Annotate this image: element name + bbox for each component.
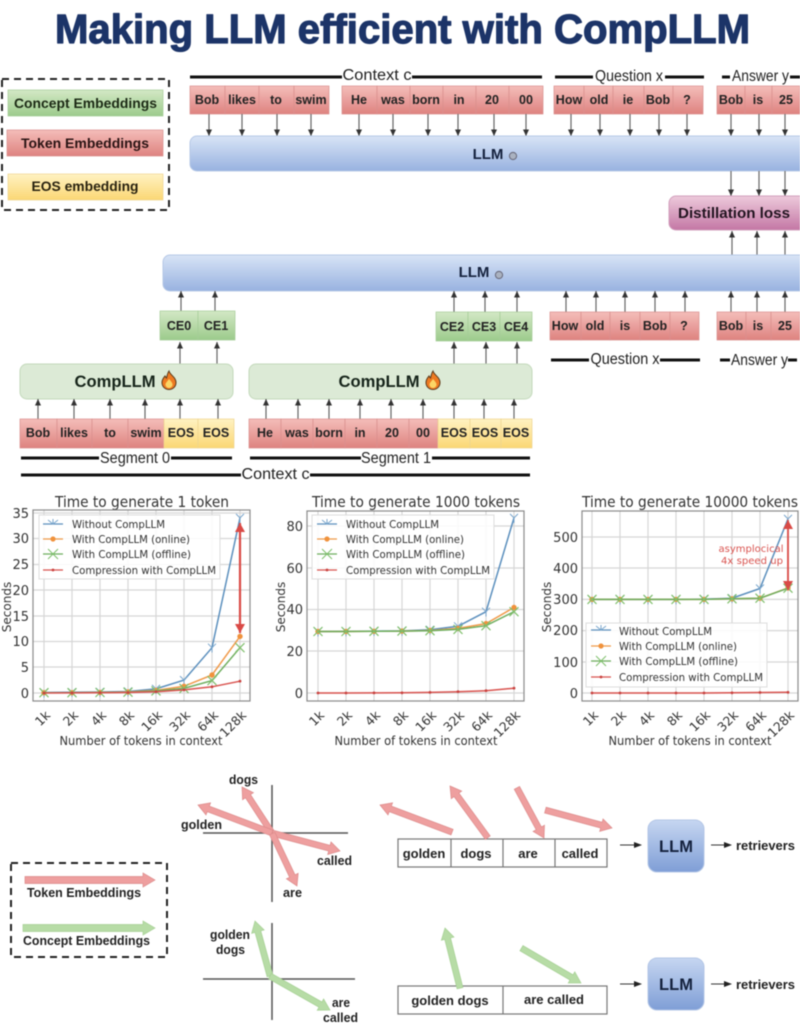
panel: CompLLM segment 1: CompLLM: [338, 372, 420, 391]
tokens: answer y (top): Bob: [719, 93, 744, 107]
concept embeddings: CE2, CE3, CE4: [436, 312, 532, 341]
chart: time to generate 10000 tokens: 400: [553, 562, 578, 577]
tokens: segment 0: EOS: [203, 426, 229, 440]
tokens: answer y (top): is: [753, 93, 763, 107]
chart: time to generate 1000 tokens: 32k: [440, 707, 468, 734]
chart: time to generate 10000 tokens: 8k: [664, 707, 686, 729]
arrows: LLM to distillation loss: [731, 171, 785, 196]
chart: time to generate 1 token: 5: [21, 661, 29, 676]
concept row with vectors: golden dogs: [411, 993, 489, 1008]
tokens: segment 0: EOS: [168, 426, 194, 440]
legend: chart 1: [39, 515, 220, 579]
legend: chart 3: Compression with CompLLM: [619, 671, 763, 684]
token row with vectors: dogs: [460, 846, 492, 861]
tokens: context c (top): Bob: [195, 93, 220, 107]
legend: chart 1: With CompLLM (offline): [72, 548, 191, 561]
chart: time to generate 1000 tokens: [274, 493, 524, 748]
annotation: speed up: 4x speed up: [721, 556, 783, 567]
chart: time to generate 1 token: 2k: [60, 707, 82, 729]
legend: chart 2: With CompLLM (online): [346, 533, 464, 546]
plot: token embedding vectors: are: [283, 885, 302, 900]
arrows: CompLLM to concept embeddings: [180, 342, 517, 364]
tokens: context c (top): He: [351, 93, 367, 107]
panel: student LLM: [163, 255, 800, 291]
tokens: answer y (lower): [717, 312, 800, 340]
token row with vectors: called: [562, 846, 598, 861]
tokens: segment 1: He: [257, 426, 273, 440]
annotation: speed up: asymplocical: [718, 544, 784, 555]
chart: time to generate 1 token: 15: [12, 610, 29, 625]
flow: concept row to LLM to retrievers: LLM: [659, 976, 693, 994]
chart: time to generate 1000 tokens: 128k: [491, 707, 524, 740]
tokens: answer y (top): [717, 86, 800, 114]
annotation: speed up: [718, 544, 784, 567]
tokens: question x (lower): is: [620, 319, 630, 333]
tokens: question x (top): [554, 86, 703, 114]
chart: time to generate 1000 tokens: Seconds: [274, 582, 288, 632]
chart: time to generate 10000 tokens: 1k: [580, 707, 602, 729]
flow: concept row to LLM to retrievers: [620, 958, 795, 1010]
arrows: student LLM to distillation loss: [732, 231, 785, 255]
label: context c (lower): Context c: [242, 466, 310, 483]
tokens: answer y (lower): is: [753, 319, 763, 333]
chart: time to generate 1000 tokens: 0: [295, 687, 303, 702]
chart: time to generate 10000 tokens: 32k: [714, 707, 742, 734]
plot: token embedding vectors: golden: [181, 817, 222, 832]
chart: time to generate 10000 tokens: Seconds: [540, 582, 554, 632]
legend: concept embeddings: Concept Embeddings: [14, 96, 157, 111]
chart: time to generate 1000 tokens: 16k: [412, 707, 440, 734]
concept embeddings: CE2, CE3, CE4: CE3: [472, 320, 496, 334]
tokens: context c (top): swim: [295, 93, 327, 107]
panel: CompLLM segment 0: CompLLM: [74, 372, 156, 391]
flow: concept row to LLM to retrievers: retrievers: [736, 977, 795, 992]
tokens: question x (top): Bob: [646, 93, 671, 107]
tokens: segment 1: born: [315, 426, 343, 440]
legend: chart 3: [586, 623, 767, 687]
chart: time to generate 1 token: 10: [12, 635, 29, 650]
chart: time to generate 1000 tokens: 20: [286, 645, 303, 660]
chart: time to generate 1 token: [0, 493, 250, 748]
arrows: tokens to LLM: [209, 114, 785, 136]
plot: concept embedding vectors: called: [323, 1010, 358, 1025]
tokens: segment 0: swim: [130, 426, 162, 440]
chart: time to generate 1 token: 25: [12, 558, 29, 573]
tokens: context c (top): 20: [485, 93, 499, 107]
label: question x (top): Question x: [595, 68, 663, 85]
tokens: segment 1: was: [284, 426, 309, 440]
tokens: answer y (lower): Bob: [719, 319, 744, 333]
tokens: segment 0: Bob: [26, 426, 51, 440]
concept embeddings: CE0, CE1: CE1: [204, 319, 228, 333]
flow: token row to LLM to retrievers: LLM: [659, 838, 693, 856]
tokens: segment 1: EOS: [503, 426, 529, 440]
chart: time to generate 1000 tokens: 8k: [390, 707, 412, 729]
chart: time to generate 1000 tokens: Number of tokens in context: [334, 734, 498, 748]
legend arrow: token embeddings: [25, 873, 155, 887]
plot: token embedding vectors: dogs: [229, 772, 258, 787]
legend: EOS embedding: [8, 174, 163, 200]
chart: time to generate 10000 tokens: 16k: [686, 707, 714, 734]
legend: chart 3: With CompLLM (online): [619, 640, 737, 653]
tokens: segment 1: EOS: [472, 426, 498, 440]
legend: token embeddings: [7, 130, 163, 156]
chart: time to generate 1 token: 35: [12, 507, 29, 522]
tokens: answer y (top): 25: [779, 93, 793, 107]
legend: chart 2: With CompLLM (offline): [346, 548, 465, 561]
concept embeddings: CE2, CE3, CE4: CE4: [504, 320, 528, 334]
concept embeddings: CE0, CE1: [160, 311, 235, 340]
concept embeddings: CE0, CE1: CE0: [167, 319, 191, 333]
legend: chart 2: [312, 515, 494, 579]
label: segment 1: Segment 1: [361, 450, 431, 467]
plot: token embedding vectors: [181, 772, 352, 902]
legend: chart 1: With CompLLM (online): [72, 533, 190, 546]
legend: chart 1: Compression with CompLLM: [72, 564, 216, 577]
legend: embedding types: [2, 79, 169, 210]
tokens: context c (top): [190, 86, 543, 114]
tokens: segment 1: 20: [385, 426, 399, 440]
chart: time to generate 1 token: 0: [21, 687, 29, 702]
chart: time to generate 10000 tokens: 300: [553, 593, 578, 608]
tokens: segment 1: EOS: [441, 426, 467, 440]
tokens: segment 0: [20, 419, 234, 448]
token row with vectors: [378, 782, 614, 867]
legend: EOS embedding: EOS embedding: [32, 179, 138, 194]
flow: token row to LLM to retrievers: [620, 820, 795, 872]
legend: arrow embedding types: [11, 863, 167, 957]
label: context c (top): Context c: [342, 67, 412, 84]
chart: time to generate 1 token: 16k: [138, 707, 166, 734]
panel: student LLM: LLM: [459, 264, 489, 281]
tokens: context c (top): in: [453, 93, 465, 107]
chart: time to generate 1000 tokens: 2k: [334, 707, 356, 729]
chart: time to generate 1 token: 20: [12, 584, 29, 599]
panel: distillation loss: Distillation loss: [678, 205, 790, 222]
chart: time to generate 1 token: Time to generate 1 token: [54, 493, 229, 511]
panel: CompLLM segment 1: [249, 364, 532, 399]
chart: time to generate 10000 tokens: 0: [570, 687, 578, 702]
chart: time to generate 1 token: 1k: [32, 707, 54, 729]
tokens: segment 1: 00: [416, 426, 430, 440]
tokens: context c (top): to: [270, 93, 282, 107]
chart: time to generate 1 token: Number of tokens in context: [60, 734, 223, 748]
label: answer y (lower): Answer y: [731, 352, 788, 369]
legend text: concept embeddings: Concept Embeddings: [23, 933, 150, 948]
chart: time to generate 1 token: 4k: [88, 707, 110, 729]
chart: time to generate 10000 tokens: 4k: [636, 707, 658, 729]
chart: time to generate 10000 tokens: 128k: [765, 707, 798, 740]
chart: time to generate 10000 tokens: 2k: [608, 707, 630, 729]
panel: distillation loss: [669, 196, 800, 230]
tokens: question x (lower): Bob: [643, 319, 668, 333]
label: answer y (top): Answer y: [732, 68, 789, 85]
tokens: question x (lower): old: [586, 319, 604, 333]
legend: chart 3: Without CompLLM: [619, 625, 712, 638]
chart: time to generate 1 token: Seconds: [0, 582, 14, 632]
panel: teacher LLM: [190, 136, 800, 171]
tokens: context c (top): likes: [228, 93, 256, 107]
chart: time to generate 1000 tokens: 4k: [362, 707, 384, 729]
legend: concept embeddings: [8, 90, 163, 116]
chart: time to generate 1000 tokens: Time to generate 1000 tokens: [311, 493, 520, 511]
chart: time to generate 10000 tokens: Number of tokens in context: [608, 734, 772, 748]
tokens: context c (top): was: [380, 93, 405, 107]
tokens: answer y (lower): 25: [778, 319, 792, 333]
tokens: question x (top): ?: [683, 93, 691, 107]
tokens: segment 0: to: [104, 426, 116, 440]
chart: time to generate 1 token: 30: [12, 532, 29, 547]
legend text: token embeddings: Token Embeddings: [27, 885, 141, 900]
chart: time to generate 1 token: 64k: [194, 707, 222, 734]
arrows: inputs to student LLM: [181, 291, 785, 312]
arrows: tokens to CompLLM: [38, 399, 514, 419]
chart: time to generate 1 token: 8k: [116, 707, 138, 729]
chart: time to generate 1 token: 128k: [217, 707, 250, 740]
panel: teacher LLM: LLM: [473, 146, 503, 163]
legend: chart 2: Compression with CompLLM: [346, 564, 490, 577]
chart: time to generate 10000 tokens: 500: [553, 531, 578, 546]
tokens: question x (lower): [550, 312, 699, 340]
tokens: segment 1: in: [354, 426, 366, 440]
tokens: question x (top): old: [590, 93, 608, 107]
legend: chart 1: Without CompLLM: [72, 518, 165, 531]
tokens: question x (top): How: [556, 93, 582, 107]
chart: time to generate 10000 tokens: 100: [553, 656, 578, 671]
chart: time to generate 10000 tokens: 64k: [742, 707, 770, 734]
concept row with vectors: are called: [524, 992, 584, 1007]
token row with vectors: are: [518, 846, 538, 861]
plot: concept embedding vectors: dogs: [216, 942, 245, 957]
chart: time to generate 1000 tokens: 1k: [306, 707, 328, 729]
plot: concept embedding vectors: are: [332, 995, 350, 1010]
chart: time to generate 1000 tokens: 40: [286, 603, 303, 618]
legend arrow: concept embeddings: [23, 921, 155, 935]
legend: token embeddings: Token Embeddings: [21, 136, 149, 151]
tokens: segment 1: [249, 419, 532, 448]
plot: concept embedding vectors: golden: [210, 927, 250, 942]
legend: chart 2: Without CompLLM: [346, 518, 439, 531]
panel: CompLLM segment 0: [20, 364, 233, 399]
plot: token embedding vectors: called: [317, 853, 352, 868]
icon: flame: [426, 371, 440, 390]
chart: time to generate 1000 tokens: 60: [286, 562, 303, 577]
concept row with vectors: [398, 926, 607, 1014]
label: question x (lower): Question x: [590, 351, 660, 368]
chart: time to generate 1000 tokens: 80: [286, 520, 303, 535]
legend: chart 3: With CompLLM (offline): [619, 655, 738, 668]
chart: time to generate 1000 tokens: 64k: [468, 707, 496, 734]
tokens: segment 0: likes: [60, 426, 88, 440]
chart: time to generate 10000 tokens: [540, 493, 798, 748]
tokens: question x (lower): How: [552, 319, 578, 333]
tokens: question x (top): ie: [623, 93, 633, 107]
concept embeddings: CE2, CE3, CE4: CE2: [440, 320, 464, 334]
tokens: context c (top): born: [412, 93, 440, 107]
tokens: question x (lower): ?: [680, 319, 688, 333]
label: segment 0: Segment 0: [100, 450, 170, 467]
icon: flame: [162, 371, 176, 390]
title: Making LLM efficient with CompLLM: [55, 6, 750, 52]
flow: token row to LLM to retrievers: retrievers: [736, 838, 795, 853]
chart: time to generate 1 token: 32k: [166, 707, 194, 734]
plot: concept embedding vectors: [203, 919, 358, 1025]
tokens: context c (top): 00: [519, 93, 533, 107]
chart: time to generate 10000 tokens: 200: [553, 624, 578, 639]
token row with vectors: golden: [403, 846, 445, 861]
